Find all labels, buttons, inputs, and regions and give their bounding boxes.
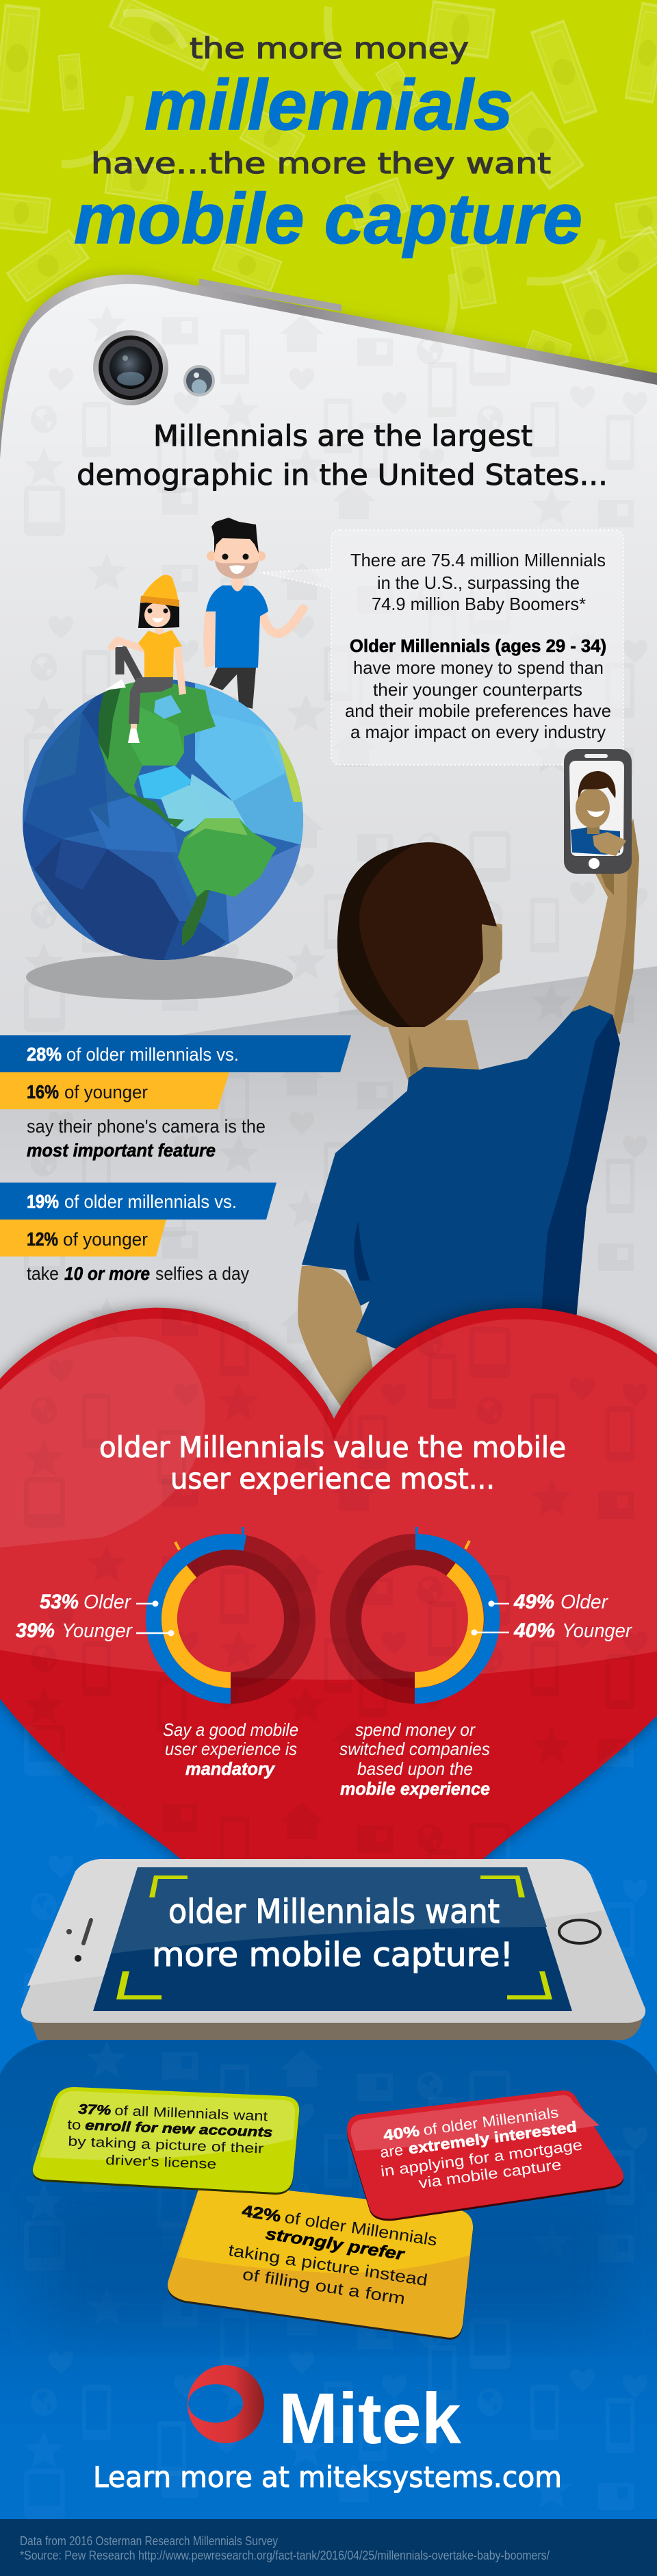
stat: phone camera most important: of older millennials vs. (66, 1044, 239, 1065)
card: green enroll for new accounts: enroll for new accounts (85, 2118, 273, 2141)
landscape phone (21, 1859, 645, 2040)
card: green enroll for new accounts: 37% (78, 2102, 112, 2119)
icon pattern on heart (24, 1309, 647, 1859)
card: green enroll for new accounts: to (67, 2117, 81, 2133)
blue lower background (0, 1548, 657, 2576)
card: yellow strongly prefer: taking a picture instead (227, 2241, 428, 2290)
title: headline: have...the more they want (91, 147, 551, 180)
caption: mobile experience (339, 1719, 490, 1799)
heart shadow (0, 1308, 657, 1999)
landscape phone: older Millennials want (168, 1893, 500, 1931)
card: yellow strongly prefer: of older Millennials (283, 2208, 439, 2250)
green header background (0, 0, 657, 493)
stat: phone camera most important: most important feature (27, 1140, 216, 1161)
stat: ten or more selfies a day: 10 or more (64, 1263, 150, 1284)
stat: ten or more selfies a day: take (27, 1263, 59, 1284)
phone frame (0, 275, 657, 1575)
icon: low-poly globe (21, 674, 308, 965)
card: yellow strongly prefer: of filling out a form (241, 2265, 407, 2308)
title: headline (74, 31, 582, 259)
card: red extremely interested: of older Millennials (422, 2104, 560, 2138)
left donut labels: Older (83, 1591, 131, 1613)
caption: mandatory: Say a good mobile (163, 1719, 298, 1740)
callout: millennials population text: 74.9 million Baby Boomers* (372, 594, 586, 614)
logo: Mitek (188, 2365, 462, 2459)
right donut labels: 40% (513, 1619, 555, 1642)
title: headline: millennials (144, 66, 513, 145)
caption: mandatory: user experience is (165, 1739, 297, 1759)
stat: ten or more selfies a day: 19% (27, 1191, 59, 1212)
callout: millennials population text: in the U.S., surpassing the (377, 572, 580, 593)
card: red extremely interested: in applying for a mortgage (380, 2136, 583, 2180)
heart lighter upper area (0, 1319, 657, 1680)
figure: man standing on globe (203, 518, 303, 709)
callout: millennials population text (260, 530, 623, 765)
card: yellow strongly prefer: 42% (241, 2201, 282, 2226)
caption: mobile experience: spend money or (355, 1719, 476, 1740)
figure: man taking selfie, hair, arm and shirt (298, 818, 639, 1411)
card: red extremely interested: via mobile capture (417, 2156, 563, 2192)
right donut labels: 49% (513, 1591, 554, 1613)
callout: millennials population text: have more money to spend than (353, 657, 604, 678)
left donut labels: Younger (62, 1620, 133, 1642)
heading: largest demographic: Millennials are the largest (153, 419, 532, 453)
left donut labels: 53% (40, 1591, 79, 1613)
stat: ten or more selfies a day (0, 1183, 276, 1284)
right donut labels (471, 1591, 632, 1642)
globe shadow (26, 955, 293, 1000)
card: red extremely interested: are (379, 2141, 404, 2161)
stat: ten or more selfies a day: 12% (27, 1228, 58, 1250)
caption: mobile experience: based upon the (357, 1758, 473, 1779)
left donut labels: 39% (16, 1619, 55, 1642)
footer bar with sources: Data from 2016 Osterman Research Millennials Survey (20, 2534, 278, 2548)
caption: mandatory (163, 1719, 298, 1779)
card: red extremely interested: extremely interested (407, 2118, 578, 2158)
card: green enroll for new accounts: by taking a picture of their (68, 2134, 264, 2157)
landscape phone: more mobile capture! (152, 1936, 513, 1974)
footer bar with sources (0, 2519, 657, 2576)
heading: user experience: older Millennials value the mobile (99, 1430, 566, 1464)
card: yellow strongly prefer (168, 2181, 473, 2340)
icon pattern on phone back (162, 362, 437, 1237)
call to action: Learn more at miteksystems.com (93, 2460, 562, 2494)
stat: phone camera most important (0, 1035, 351, 1161)
stat: phone camera most important: say their phone's camera is the (27, 1116, 266, 1137)
icon: phone held for selfie (564, 749, 632, 874)
stat: phone camera most important: 28% (27, 1044, 62, 1065)
callout: millennials population text: and their mobile preferences have (345, 700, 611, 721)
dark blue lower panel (0, 2037, 657, 2519)
card: green enroll for new accounts: driver's license (105, 2153, 217, 2172)
phone side button (199, 279, 342, 312)
icon: camera flash (183, 365, 215, 396)
donut chart: switched companies over mobile experience (338, 1527, 492, 1696)
title: headline: mobile capture (74, 179, 582, 259)
card: red extremely interested (347, 2091, 623, 2221)
heading: user experience (99, 1430, 566, 1495)
title: headline: the more money (190, 31, 469, 65)
left donut labels (16, 1591, 174, 1642)
phone back body (0, 284, 657, 1575)
card: green enroll for new accounts: of all Millennials want (114, 2104, 268, 2124)
heading: largest demographic: demographic in the United States... (77, 458, 608, 492)
footer bar with sources: *Source: Pew Research http://www.pewresearch.org/fact-tank/2016/04/25/millennials-overtake-baby-boomers/ (20, 2549, 550, 2562)
heart panel (0, 1308, 657, 1999)
card: red extremely interested: 40% (382, 2122, 420, 2144)
heading: largest demographic (77, 419, 608, 492)
callout: millennials population text: their younger counterparts (373, 679, 582, 700)
money bills pattern (0, 0, 657, 390)
caption: mobile experience: switched companies (339, 1739, 490, 1759)
heart highlight (0, 1337, 205, 1548)
stat: ten or more selfies a day: of younger (63, 1229, 148, 1250)
right donut labels: Older (561, 1591, 608, 1613)
icon: camera lens (93, 330, 168, 405)
stat: phone camera most important: 16% (27, 1081, 59, 1102)
heading: user experience: user experience most... (170, 1462, 495, 1495)
stat: ten or more selfies a day: of older millennials vs. (64, 1191, 237, 1212)
right donut labels: Younger (562, 1620, 632, 1642)
callout: millennials population text: Older Millennials (ages 29 - 34) (350, 635, 606, 656)
callout: millennials population text: a major impact on every industry (350, 722, 606, 742)
cards glow (41, 2191, 616, 2328)
caption: mandatory: mandatory (185, 1758, 276, 1779)
caption: mobile experience: mobile experience (340, 1778, 490, 1799)
phone body shadow (0, 275, 657, 493)
icon pattern on blue (162, 2097, 437, 2476)
stat: phone camera most important: of younger (64, 1082, 148, 1102)
card: green enroll for new accounts (33, 2087, 299, 2195)
donut chart: good mobile experience is mandatory (153, 1527, 308, 1695)
stat: ten or more selfies a day: selfies a day (155, 1263, 249, 1284)
floor (0, 966, 657, 1150)
card: yellow strongly prefer: strongly prefer (264, 2225, 407, 2264)
logo: Mitek: Mitek (279, 2379, 462, 2459)
callout: millennials population text: There are 75.4 million Millennials (350, 550, 606, 570)
figure: girl sitting on globe (105, 575, 186, 743)
